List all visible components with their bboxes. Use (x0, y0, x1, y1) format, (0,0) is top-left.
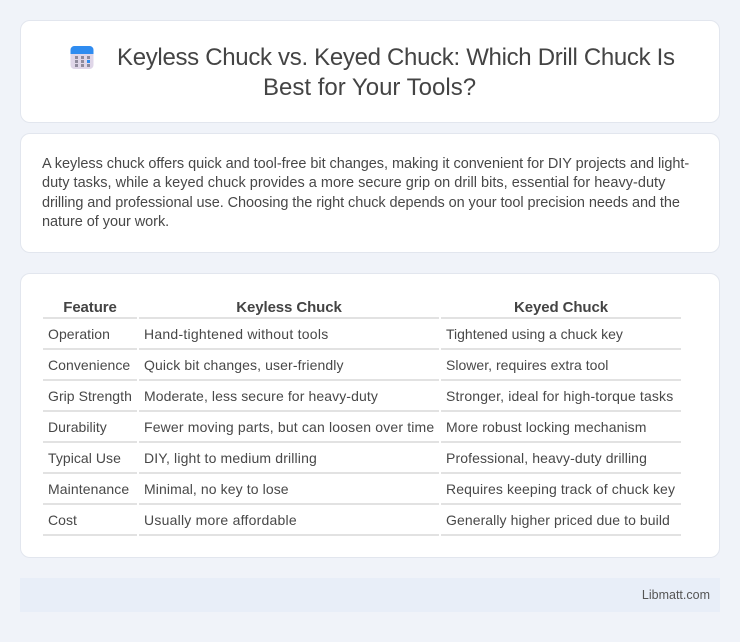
row: Operation: Tightened using a chuck key (446, 326, 623, 342)
footer text: Libmatt.com (642, 588, 710, 602)
row: Maintenance: Requires keeping track of chuck key (446, 481, 675, 497)
row: Durability: Durability (48, 419, 107, 435)
row: Durability: Fewer moving parts, but can loosen over time (144, 419, 434, 435)
table header: Keyed Chuck: Keyed Chuck (514, 299, 608, 316)
row: Durability: More robust locking mechanism (446, 419, 647, 435)
intro paragraph: A keyless chuck offers quick and tool-free bit changes, making it convenient for DIY projects and light- (42, 156, 689, 172)
row: Cost (48, 512, 670, 528)
row: Maintenance: Maintenance (48, 481, 129, 497)
footer bar (20, 578, 720, 612)
panel: intro text card (20, 133, 720, 253)
row: Operation: Operation (48, 326, 110, 342)
row: Typical Use: DIY, light to medium drilling (144, 450, 317, 466)
row: Convenience: Convenience (48, 357, 130, 373)
row: Cost: Cost (48, 512, 77, 528)
row: Grip Strength (48, 388, 673, 404)
title: Best for Your Tools? (263, 74, 476, 101)
row: Operation (48, 326, 623, 342)
row: Grip Strength: Stronger, ideal for high-torque tasks (446, 388, 673, 404)
row: Convenience: Quick bit changes, user-friendly (144, 357, 344, 373)
comparison table (43, 317, 681, 536)
row: Operation: Hand-tightened without tools (144, 326, 328, 342)
row: Durability (48, 419, 647, 435)
intro paragraph: drilling and professional use. Choosing the right chuck depends on your tool precision needs and the (42, 194, 680, 210)
intro paragraph (42, 156, 689, 230)
row: Convenience: Slower, requires extra tool (446, 357, 608, 373)
row: Typical Use (48, 450, 647, 466)
row: Grip Strength: Grip Strength (48, 388, 132, 404)
row: Maintenance (48, 481, 675, 497)
table header: Keyless Chuck: Keyless Chuck (236, 299, 342, 316)
intro paragraph: duty tasks, while a keyed chuck provides a more secure grip on drill bits, essential for heavy-duty (42, 175, 665, 191)
intro paragraph: nature of your work. (42, 214, 169, 230)
row: Cost: Usually more affordable (144, 512, 297, 528)
row: Convenience (48, 357, 608, 373)
row: Maintenance: Minimal, no key to lose (144, 481, 289, 497)
row: Typical Use: Typical Use (48, 450, 121, 466)
row: Grip Strength: Moderate, less secure for heavy-duty (144, 388, 378, 404)
panel: comparison table card (20, 273, 720, 558)
row: Typical Use: Professional, heavy-duty drilling (446, 450, 647, 466)
title: Keyless Chuck vs. Keyed Chuck: Which Drill Chuck Is (117, 44, 675, 71)
table header: Feature: Feature (63, 299, 117, 316)
panel: title card (20, 20, 720, 123)
title (117, 44, 675, 101)
row: Cost: Generally higher priced due to build (446, 512, 670, 528)
icon: calendar (70, 46, 94, 69)
